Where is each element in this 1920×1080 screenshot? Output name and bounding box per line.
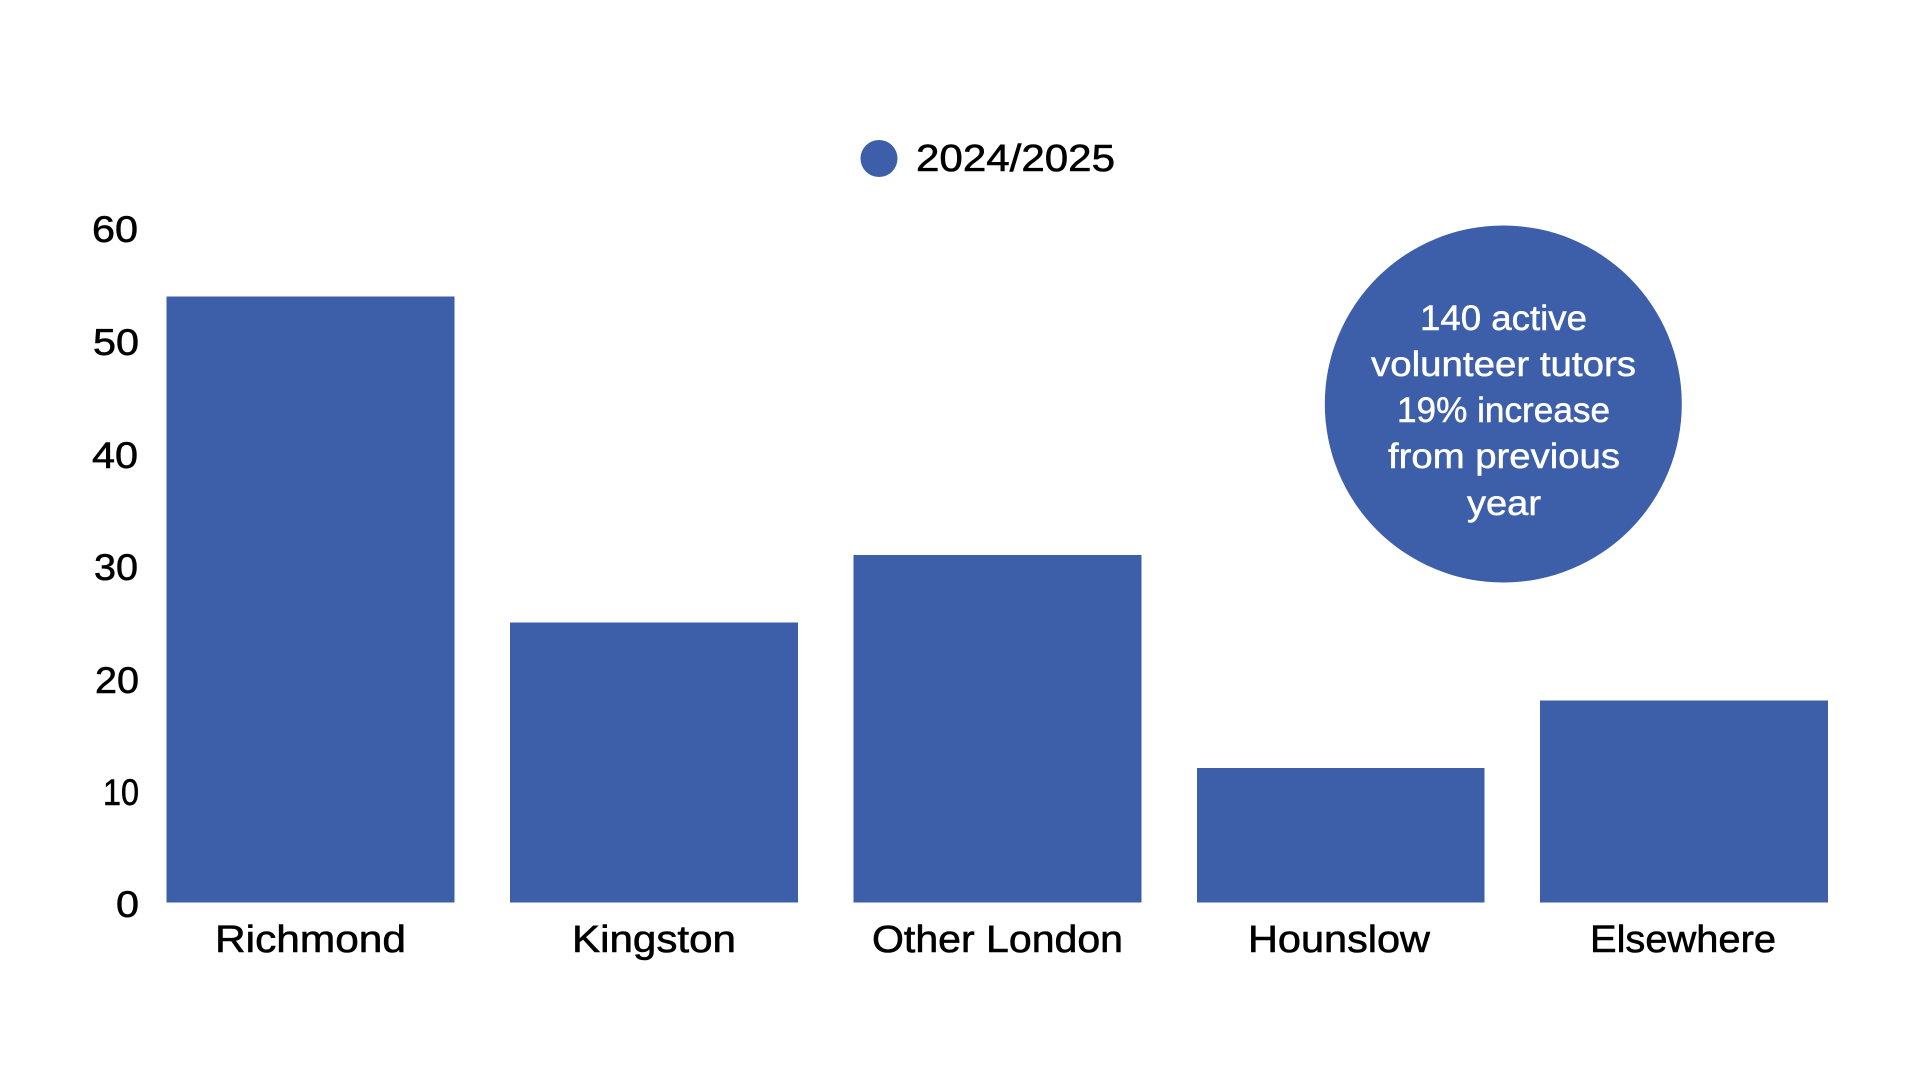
- bar: Kingston 25: [510, 622, 798, 902]
- bar: Elsewhere 18: [1540, 700, 1828, 902]
- x axis category labels: Richmond: [215, 919, 406, 961]
- callout text: 140 active: [1420, 299, 1587, 338]
- x axis category labels: Kingston: [572, 919, 736, 961]
- callout text: volunteer tutors: [1371, 345, 1636, 384]
- y axis labels: 50: [93, 322, 139, 363]
- x axis category labels: Elsewhere: [1590, 919, 1776, 961]
- legend: [860, 138, 1115, 180]
- y axis labels: 20: [95, 660, 139, 701]
- callout text: from previous: [1388, 437, 1620, 476]
- bar: Other London 31: [854, 555, 1142, 902]
- y axis labels: 40: [92, 435, 138, 476]
- callout text: 19% increase: [1397, 391, 1610, 430]
- y axis labels: 30: [94, 547, 138, 588]
- callout circle: [1325, 226, 1682, 582]
- callout text: [1371, 299, 1636, 523]
- legend label: 2024/2025: [916, 138, 1115, 180]
- bar: Hounslow 12: [1197, 768, 1484, 902]
- x axis category labels: Hounslow: [1248, 919, 1431, 961]
- x axis category labels: [215, 919, 1776, 961]
- callout: 140 active volunteer tutors: [1325, 226, 1682, 582]
- callout text: year: [1467, 484, 1541, 523]
- legend marker: [860, 140, 898, 177]
- bar chart: [166, 296, 1828, 902]
- x axis category labels: Other London: [872, 919, 1123, 961]
- y axis labels: 0: [116, 884, 139, 925]
- bar: Richmond 54: [166, 296, 454, 902]
- y axis labels: [92, 209, 139, 925]
- y axis labels: 10: [103, 772, 139, 813]
- y axis labels: 60: [92, 209, 138, 250]
